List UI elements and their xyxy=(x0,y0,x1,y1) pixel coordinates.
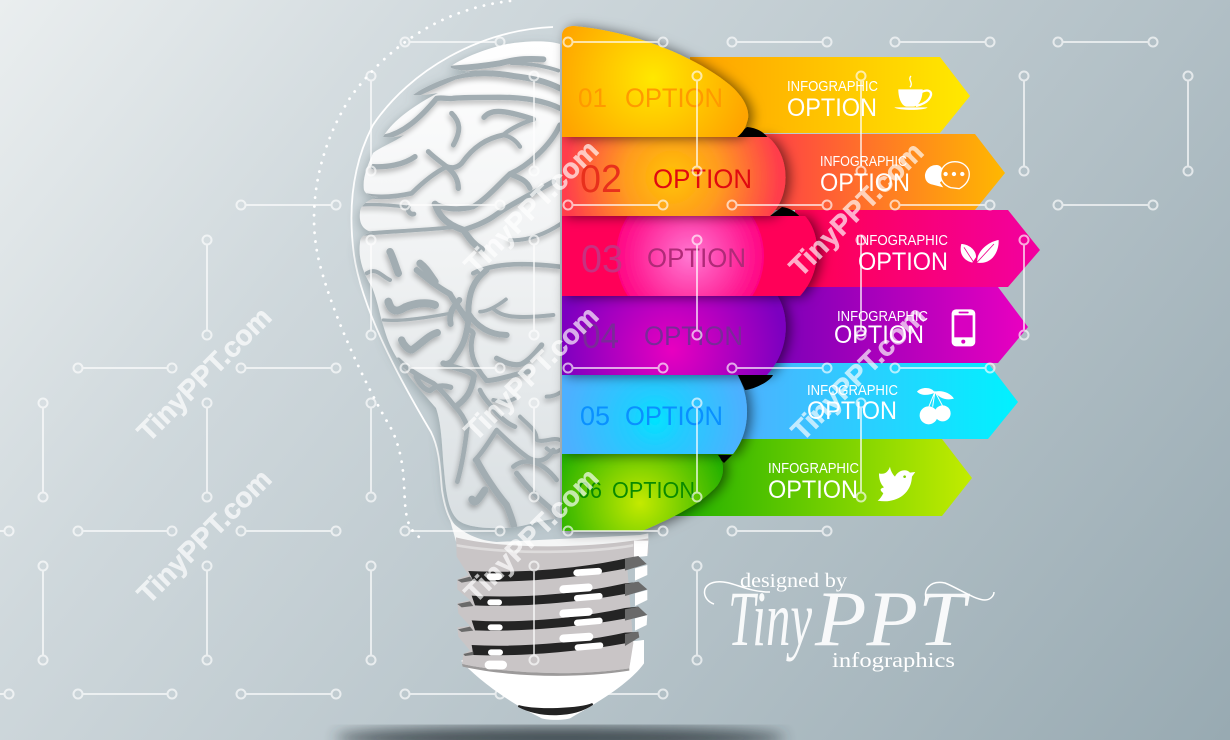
bulb outline xyxy=(351,27,553,530)
watermarks: TinyPPT.com xyxy=(785,300,931,446)
designed by logo xyxy=(704,570,994,672)
panel 3 xyxy=(557,208,830,305)
watermarks: TinyPPT.com xyxy=(131,463,277,609)
brain folds xyxy=(360,59,562,527)
panel labels: OPTION xyxy=(625,83,723,113)
base lower rim xyxy=(462,664,629,676)
arrow 2 xyxy=(760,134,1005,210)
panel labels: 05 xyxy=(580,401,610,431)
right thread highlights xyxy=(629,541,648,668)
icon: bird xyxy=(878,467,915,501)
thread fins xyxy=(457,556,647,656)
designed by logo: Tiny xyxy=(728,575,812,662)
panel 2 xyxy=(562,137,786,216)
panel labels: 01 xyxy=(578,83,607,113)
dark wedges between tabs xyxy=(716,127,800,463)
arrow labels: INFOGRAPHIC xyxy=(837,309,928,325)
arrow labels: INFOGRAPHIC xyxy=(856,233,948,249)
panel 4 xyxy=(562,295,786,375)
base tip cap xyxy=(518,704,593,714)
arrow labels: OPTION xyxy=(834,321,924,349)
brain xyxy=(360,41,562,528)
watermarks: TinyPPT.com xyxy=(458,300,604,446)
panel 6 xyxy=(562,454,723,531)
arrow labels: OPTION xyxy=(787,94,877,122)
collar stripes xyxy=(457,544,633,553)
arrow 1 xyxy=(690,57,970,133)
icon: speech bubbles xyxy=(925,162,969,189)
panel 5 xyxy=(562,375,747,454)
icon: coffee cup xyxy=(894,76,931,110)
arrow labels: OPTION xyxy=(820,169,910,197)
thread highlights xyxy=(485,568,604,669)
arrow 4 xyxy=(770,287,1028,363)
base dome xyxy=(462,640,644,720)
threaded body xyxy=(456,537,648,673)
panel 1 xyxy=(562,26,748,137)
arrow labels: INFOGRAPHIC xyxy=(820,154,907,170)
icon: smartphone xyxy=(952,309,975,346)
lamp base xyxy=(450,520,648,720)
bulb ground shadow xyxy=(335,727,785,740)
panel labels: 03 xyxy=(581,238,623,281)
designed by logo: PPT xyxy=(814,575,970,662)
panel labels: 06 xyxy=(578,477,602,503)
designed by logo: designed by xyxy=(740,570,847,592)
arrow labels: INFOGRAPHIC xyxy=(807,383,898,399)
icon: cherries xyxy=(917,388,954,424)
panel labels: OPTION xyxy=(653,164,752,194)
panel labels: 02 xyxy=(580,158,622,201)
panel labels: 04 xyxy=(582,317,619,356)
panel labels: OPTION xyxy=(644,321,743,351)
base collar xyxy=(450,520,648,548)
watermarks: TinyPPT.com xyxy=(458,134,604,280)
dotted arc xyxy=(314,1,510,540)
watermarks xyxy=(131,134,931,609)
arrow labels: OPTION xyxy=(858,248,948,276)
thread slits xyxy=(468,557,638,655)
panel labels: OPTION xyxy=(612,477,695,503)
panel labels xyxy=(578,83,752,503)
watermarks: TinyPPT.com xyxy=(131,301,277,447)
watermarks: TinyPPT.com xyxy=(783,136,929,282)
arrow 3 xyxy=(795,210,1040,287)
arrow labels: OPTION xyxy=(768,476,858,504)
arrow labels xyxy=(768,79,948,504)
icon: leaves xyxy=(961,240,999,263)
arrow 5 xyxy=(735,363,1018,439)
arrow labels: INFOGRAPHIC xyxy=(787,79,878,95)
arrow labels: OPTION xyxy=(807,397,897,425)
arrow 6 xyxy=(675,439,972,516)
panel labels: OPTION xyxy=(625,401,723,431)
watermarks: TinyPPT.com xyxy=(458,462,604,608)
panel labels: OPTION xyxy=(647,243,746,273)
arrow labels: INFOGRAPHIC xyxy=(768,461,859,477)
designed by logo: infographics xyxy=(832,648,955,672)
